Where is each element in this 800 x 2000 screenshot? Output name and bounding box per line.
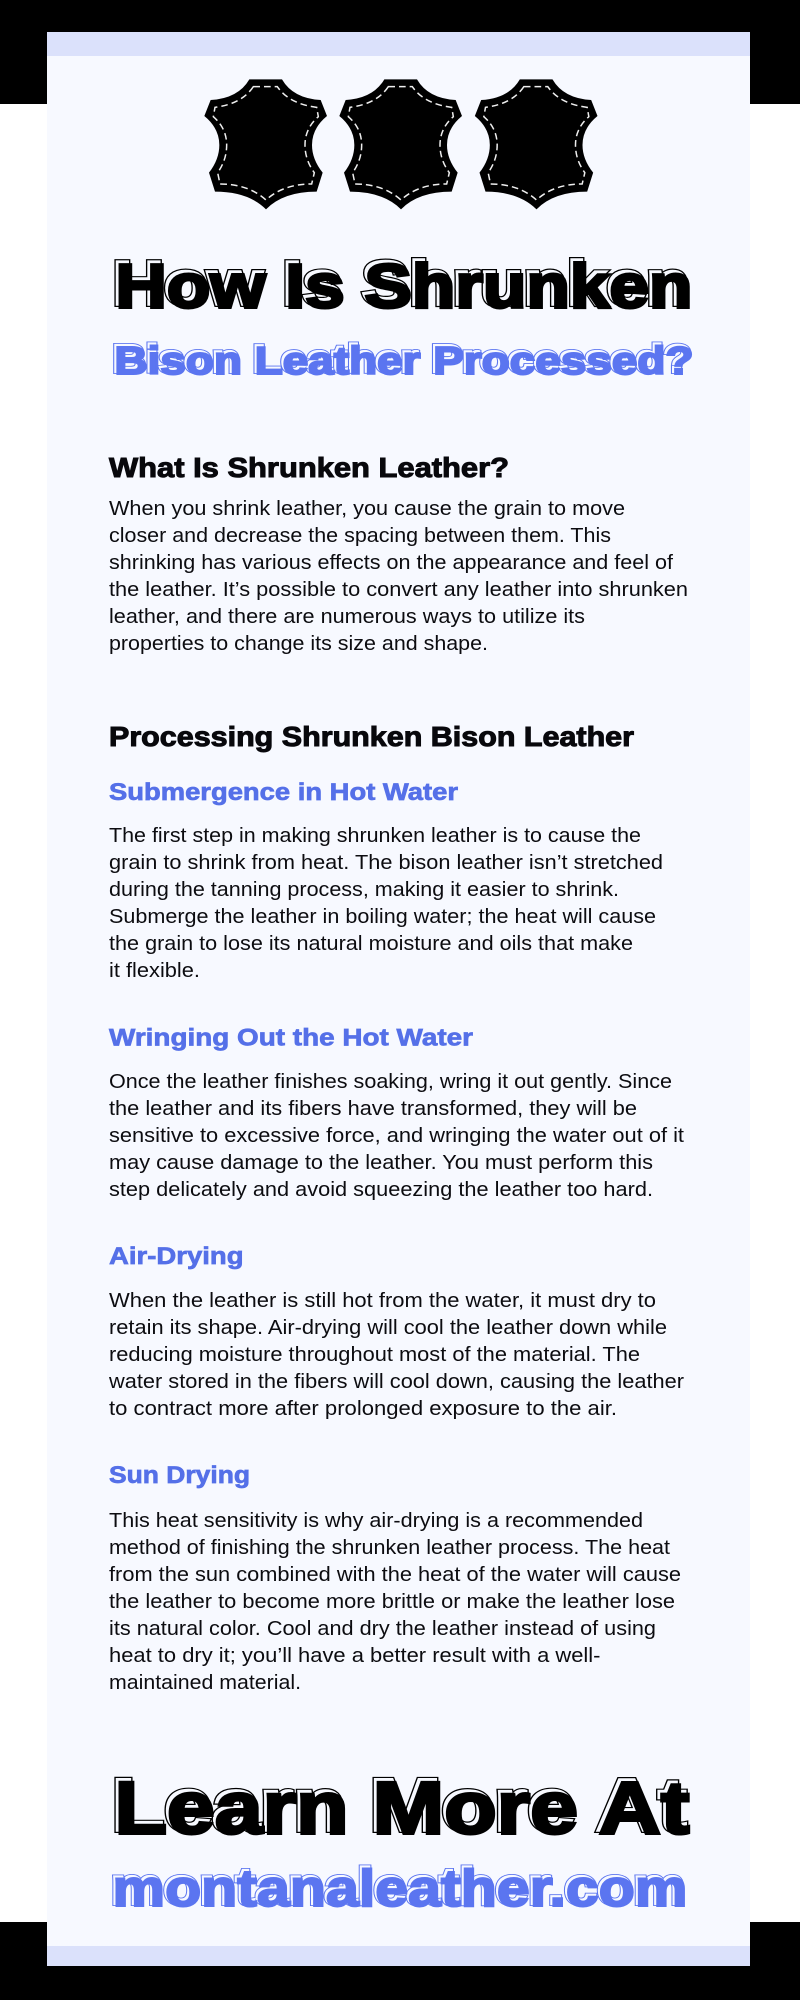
text block: shrunken leather intro: closer and decrease the spacing between them. This bbox=[109, 524, 611, 547]
text block: wringing bbox=[109, 1070, 684, 1201]
heading: Processing Shrunken Bison Leather: Processing Shrunken Bison Leather bbox=[109, 721, 634, 752]
text block: wringing: may cause damage to the leather. You must perform this bbox=[109, 1151, 653, 1174]
text block: sun drying: This heat sensitivity is why air-drying is a recommended bbox=[109, 1509, 643, 1532]
text block: wringing: Once the leather finishes soaking, wring it out gently. Since bbox=[109, 1070, 672, 1093]
title: How Is Shrunken: How Is Shrunken bbox=[112, 250, 690, 318]
text block: sun drying: from the sun combined with the heat of the water will cause bbox=[109, 1563, 681, 1586]
text block: submergence: the grain to lose its natural moisture and oils that make bbox=[109, 932, 633, 955]
text block: wringing: step delicately and avoid squeezing the leather too hard. bbox=[109, 1178, 653, 1201]
icon: leather hide 2 bbox=[339, 79, 462, 209]
text block: air-drying: retain its shape. Air-drying will cool the leather down while bbox=[109, 1316, 667, 1339]
text block: air-drying bbox=[108, 1289, 684, 1420]
text block: submergence: The first step in making shrunken leather is to cause the bbox=[109, 824, 641, 847]
text block: air-drying: water stored in the fibers will cool down, causing the leather bbox=[108, 1370, 684, 1393]
footer heading: Learn More At: Learn More At bbox=[114, 1766, 690, 1850]
title: Bison Leather Processed?: Bison Leather Processed? bbox=[112, 338, 692, 381]
heading: What Is Shrunken Leather?: What Is Shrunken Leather? bbox=[109, 452, 509, 483]
text block: sun drying: maintained material. bbox=[109, 1671, 301, 1694]
text block: submergence: Submerge the leather in boiling water; the heat will cause bbox=[109, 905, 656, 928]
subheading: Submergence in Hot Water: Submergence in Hot Water bbox=[109, 779, 458, 806]
footer link: montanaleather.com: montanaleather.com bbox=[110, 1858, 686, 1916]
title: Bison Leather Processed?: Bison Leather Processed? bbox=[112, 338, 692, 381]
text block: shrunken leather intro: When you shrink leather, you cause the grain to move bbox=[109, 497, 625, 520]
text block: shrunken leather intro: leather, and there are numerous ways to utilize its bbox=[109, 605, 585, 628]
subheading: Air-Drying: Air-Drying bbox=[109, 1243, 244, 1270]
text block: submergence: it flexible. bbox=[109, 959, 200, 982]
text block: sun drying: method of finishing the shrunken leather process. The heat bbox=[109, 1536, 670, 1559]
title: How Is Shrunken: How Is Shrunken bbox=[112, 250, 690, 318]
text block: wringing: the leather and its fibers have transformed, they will be bbox=[109, 1097, 637, 1120]
icon: leather hide 3 bbox=[475, 79, 597, 209]
footer heading: Learn More At: Learn More At bbox=[112, 1764, 686, 1846]
text block: air-drying: When the leather is still hot from the water, it must dry to bbox=[109, 1289, 656, 1312]
icon: leather hide 1 bbox=[204, 79, 327, 209]
text block: shrunken leather intro: shrinking has various effects on the appearance and feel of bbox=[109, 551, 673, 574]
title: Bison Leather Processed?: Bison Leather Processed? bbox=[114, 340, 694, 383]
text block: submergence bbox=[109, 824, 663, 982]
text block: shrunken leather intro: the leather. It’s possible to convert any leather into shrunken bbox=[109, 578, 688, 601]
text block: sun drying: the leather to become more brittle or make the leather lose bbox=[109, 1590, 675, 1613]
text block: air-drying: to contract more after prolonged exposure to the air. bbox=[109, 1397, 617, 1420]
text block: sun drying: its natural color. Cool and dry the leather instead of using bbox=[109, 1617, 656, 1640]
text block: shrunken leather intro: properties to change its size and shape. bbox=[109, 632, 488, 655]
title: How Is Shrunken: How Is Shrunken bbox=[116, 252, 692, 322]
text block: submergence: grain to shrink from heat. The bison leather isn’t stretched bbox=[109, 851, 663, 874]
footer heading: Learn More At: Learn More At bbox=[112, 1764, 686, 1846]
footer link: montanaleather.com: montanaleather.com bbox=[110, 1858, 686, 1916]
text block: submergence: during the tanning process, making it easier to shrink. bbox=[109, 878, 619, 901]
subheading: Sun Drying: Sun Drying bbox=[109, 1462, 250, 1489]
text block: shrunken leather intro bbox=[109, 497, 688, 655]
text block: air-drying: reducing moisture throughout most of the material. The bbox=[109, 1343, 640, 1366]
text block: sun drying bbox=[109, 1509, 681, 1694]
subheading: Wringing Out the Hot Water: Wringing Out the Hot Water bbox=[109, 1024, 473, 1052]
text block: wringing: sensitive to excessive force, and wringing the water out of it bbox=[109, 1124, 684, 1147]
text block: sun drying: heat to dry it; you’ll have a better result with a well- bbox=[109, 1644, 600, 1667]
footer link: montanaleather.com: montanaleather.com bbox=[112, 1860, 688, 1918]
